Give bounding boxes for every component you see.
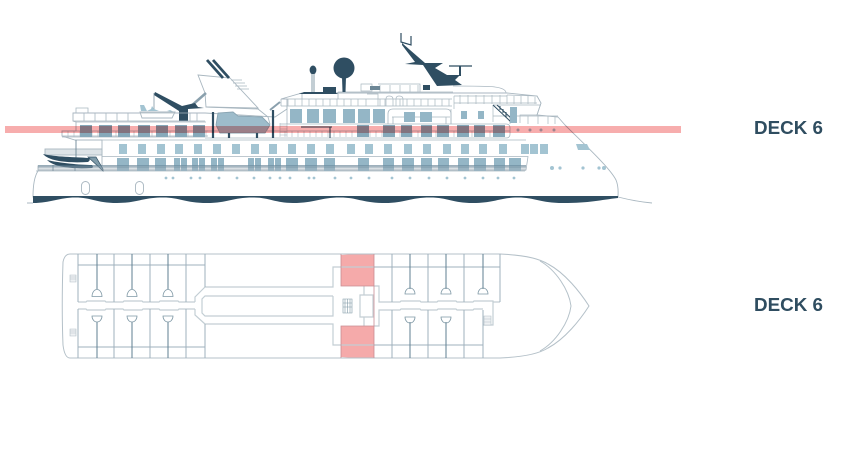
davit posts (213, 110, 273, 138)
inner bow curve (540, 261, 571, 351)
hull ovals (82, 182, 90, 194)
row frames (36, 140, 528, 171)
deck plan (62, 254, 589, 358)
zodiac boats (43, 154, 93, 168)
central core (360, 286, 392, 326)
mast posts (53, 140, 76, 171)
aft platform (45, 149, 102, 155)
radar post (459, 66, 461, 76)
bow vent (576, 144, 590, 150)
radar globe and mast (299, 58, 430, 94)
highlighted cabin edge (341, 254, 374, 358)
deck 6 highlight band (5, 126, 681, 133)
highlighted cabins (341, 254, 374, 358)
sail stripes (231, 80, 249, 89)
crane arm grey (190, 93, 206, 107)
aft stair (88, 157, 103, 171)
funnel sail (198, 75, 258, 108)
funnel pipes (207, 60, 229, 78)
ship side elevation (27, 33, 652, 203)
cabin divider lines dark (97, 254, 483, 358)
ship hull (33, 93, 618, 197)
bathroom door arcs (92, 288, 488, 323)
rear corridor (78, 301, 195, 310)
lounge frame (388, 109, 451, 124)
bridge roof and wing (451, 86, 558, 124)
grey arm and ladder (270, 102, 280, 110)
crane cable (153, 93, 155, 110)
upper deck structure (281, 84, 453, 124)
plan outline (62, 254, 589, 358)
mast antennas (401, 33, 472, 66)
main mast (402, 43, 462, 86)
rail over balconies (38, 166, 526, 167)
upper rail (288, 94, 452, 106)
bow tail line (27, 197, 652, 203)
service stairs (70, 275, 491, 336)
window row: deck 6 (80, 125, 505, 137)
window row: balcony doors (117, 158, 521, 171)
ladder (280, 123, 287, 137)
lifeboat deck line (206, 107, 270, 124)
davit foot table (301, 127, 332, 138)
label: deck 6 plan view: DECK 6 (754, 295, 823, 315)
hull port lights (165, 128, 606, 179)
window row: portholes (119, 144, 548, 154)
central corridor (195, 267, 374, 345)
stair core (343, 299, 352, 313)
window row: upper lounge (290, 107, 517, 123)
deck lines (62, 124, 510, 138)
forward corridor (392, 301, 500, 325)
rail hatch deck 6 (68, 131, 502, 137)
roof railing (361, 84, 418, 92)
crane (154, 92, 204, 121)
rear top deck rails (62, 108, 208, 136)
label: deck 6 side view: DECK 6 (754, 118, 823, 138)
forward stair (493, 105, 512, 122)
lifeboat (216, 112, 270, 133)
water band (33, 196, 618, 203)
tender boat on top deck (140, 105, 175, 118)
deck band below balconies (38, 166, 526, 171)
cabin divider lines light (78, 254, 500, 358)
